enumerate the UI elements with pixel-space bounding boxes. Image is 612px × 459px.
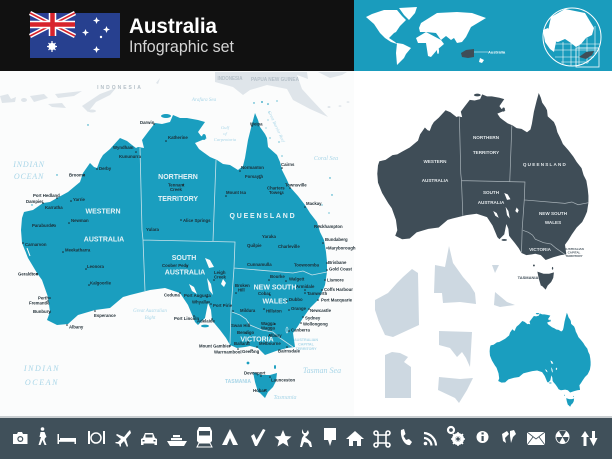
city labels: Hobart (253, 388, 267, 393)
blue small map (490, 313, 591, 407)
city labels: Bourke (270, 274, 285, 279)
city labels: Mount Gambier (199, 344, 231, 348)
icon: walker (38, 427, 46, 445)
dark map state labels: NORTHERN (473, 135, 500, 140)
city labels: Wagga (261, 326, 276, 330)
city labels: Cobar (258, 291, 271, 296)
icon: info (476, 431, 488, 443)
state borders (140, 148, 327, 347)
dark map state labels: NEW SOUTH (539, 211, 568, 216)
lakes (189, 258, 226, 295)
icon: speech marker (324, 428, 336, 446)
sea and ocean labels: Coral Sea (314, 156, 338, 162)
city labels: Normanton (241, 165, 264, 170)
city labels: Newcastle (310, 308, 332, 313)
city labels: Leigh (214, 270, 226, 275)
state labels: NORTHERN (158, 174, 198, 181)
icon: australian flag (30, 13, 120, 58)
icon: car (141, 433, 157, 445)
city labels: Bairnsdale (278, 348, 301, 354)
dark map state labels: AUSTRALIAN (564, 247, 584, 251)
silhouette: new south wales (438, 377, 473, 403)
icon: camera (13, 432, 28, 444)
city labels: Swan Hill (231, 323, 250, 328)
silhouette: victoria (494, 292, 515, 307)
panel: map background (0, 71, 354, 416)
locator: australia marker and label (461, 49, 506, 58)
city labels: Brisbane (328, 260, 347, 265)
icon: gears (448, 427, 465, 446)
city labels: Maryborough (328, 246, 356, 250)
icon: radiation (556, 430, 570, 444)
city labels: Dampier (26, 199, 44, 204)
city labels: Launceston (271, 378, 295, 382)
city labels: Cunnamulla (247, 262, 272, 267)
icon: fork and plate (88, 431, 105, 444)
state labels: AUSTRALIA (165, 270, 205, 276)
city labels: Ceduna (164, 292, 180, 298)
city labels: Sydney (305, 316, 321, 320)
state labels (84, 174, 297, 344)
city labels: Newman (71, 218, 89, 223)
sea and ocean labels: OCEAN (25, 378, 59, 387)
city labels: Port Lincoln (174, 316, 199, 321)
city labels: Hill (238, 288, 245, 292)
city labels: Yaraka (262, 234, 276, 239)
city labels: Charters (267, 186, 285, 190)
state labels: WALES (263, 298, 288, 306)
state labels: TERRITORY (158, 196, 198, 203)
dark map state labels: TERRITORY (565, 254, 583, 258)
sea and ocean labels: Bight (145, 316, 156, 321)
world locator map (366, 7, 486, 65)
silhouette: northern territory (385, 352, 411, 398)
city labels: Devonport (244, 370, 266, 376)
dark map state labels: AUSTRALIA (478, 200, 505, 205)
city labels: Toowoomba (294, 262, 320, 268)
state labels: SOUTH (172, 255, 196, 262)
city labels: Towers (269, 190, 284, 195)
country labels: north of map (218, 76, 299, 83)
city labels: Hillston (266, 308, 282, 314)
act (286, 327, 288, 333)
state labels: NEW SOUTH (254, 284, 296, 292)
city labels: Coffs Harbour (324, 287, 353, 292)
city labels: Dubbo (289, 297, 303, 302)
city labels: Perth (38, 296, 49, 300)
globe locator (543, 8, 601, 67)
city labels: Albany (69, 324, 84, 330)
icon: globe (502, 430, 516, 443)
city labels: Quilpie (247, 243, 262, 248)
city labels: Mackay (306, 201, 322, 206)
dark map state labels: TERRITORY (473, 150, 499, 155)
sea and ocean labels: Tasman Sea (303, 366, 341, 375)
city labels: Port Macquarie (321, 298, 353, 302)
icon: bed (58, 434, 76, 444)
icon: command key (374, 431, 390, 447)
icon row (13, 427, 598, 447)
city labels: Bendigo (237, 330, 255, 335)
dark map state labels: VICTORIA (529, 247, 552, 252)
icon: up and down arrows (581, 431, 598, 446)
city labels: Creek (214, 274, 227, 280)
state labels: WESTERN (86, 208, 120, 216)
city labels: Broken (235, 283, 250, 288)
city labels: Gold Coast (329, 266, 352, 272)
city labels: Bunbury (33, 309, 51, 314)
subtitle: Infographic set (129, 37, 234, 56)
city labels: Fremantle (29, 300, 50, 306)
city labels: Port Hedland (33, 193, 60, 198)
city labels: Ballarat (234, 341, 250, 346)
city labels: Darwin (140, 120, 155, 125)
sea and ocean labels: AUSTRALIAN (294, 338, 318, 342)
city labels: Coober Pedy (162, 263, 189, 268)
city labels: Walgett (289, 276, 305, 282)
main map of australia (21, 100, 333, 398)
city labels: Armidale (296, 284, 315, 289)
city labels: Whyalla (192, 300, 209, 304)
city labels: Paraburdoo (32, 223, 56, 228)
city labels: Weipa (250, 122, 263, 126)
city labels: Lismore (327, 278, 344, 282)
reef islets (31, 100, 333, 214)
sea and ocean labels: TASMANIA (225, 379, 251, 385)
sea and ocean labels: CAPITAL (298, 342, 315, 346)
icon: plane (115, 430, 131, 447)
dark map state labels (422, 135, 584, 280)
city labels: Charleville (278, 244, 300, 249)
icon: rss (424, 433, 436, 446)
country labels: north of map: INDONESIA (218, 76, 243, 82)
city labels: Wyndham (113, 145, 134, 150)
icon: check (251, 429, 266, 446)
dark map state labels: TASMANIA (518, 275, 539, 280)
icon: phone (401, 429, 412, 445)
city labels: Wollongong (303, 322, 328, 326)
city labels: Townsville (285, 182, 307, 188)
icon: train (197, 427, 212, 447)
country labels: north of map: PAPUA NEW GUINEA (251, 77, 299, 83)
city labels: Wagga (261, 321, 276, 326)
city labels: Alice Springs (183, 218, 211, 223)
city labels: Warrnambool (214, 350, 242, 354)
header band (0, 0, 612, 71)
city labels: Geelong (242, 349, 260, 354)
dark map state labels: AUSTRALIA (422, 178, 449, 183)
city labels: Kalgoorlie (90, 280, 112, 286)
silhouette: queensland (434, 246, 476, 304)
city labels: Meekatharra (65, 248, 91, 252)
icon: tent (222, 429, 238, 445)
city dots (22, 123, 328, 391)
landmass (21, 113, 327, 398)
dark map state labels: QUEENSLAND (523, 162, 567, 167)
city labels (18, 120, 356, 393)
city labels: Kununurra (119, 154, 142, 159)
city labels: Port Augusta (184, 293, 211, 298)
sea and ocean labels: INDIAN (23, 364, 60, 373)
icon: star (274, 430, 292, 446)
city labels: Albury (268, 333, 282, 338)
sea and ocean labels: TERRITORY (295, 347, 317, 351)
city labels: Orange (291, 306, 307, 311)
sea and ocean labels: OCEAN (14, 172, 44, 181)
city labels: Forsayth (245, 174, 264, 179)
silhouette: tasmania (492, 265, 499, 273)
sea and ocean labels: Gulf (221, 125, 230, 130)
city labels: Yulara (146, 227, 160, 232)
city labels: Mildura (240, 308, 256, 313)
city labels: Katherine (168, 135, 188, 140)
city labels: Port Pirie (213, 303, 233, 308)
sea and ocean labels: Great Barrier Reef (267, 110, 286, 144)
dark map state labels: WESTERN (424, 159, 447, 164)
neighbouring land: papua new guinea (215, 72, 350, 117)
city labels: Cairns (281, 162, 295, 167)
sea and ocean labels: Arafura Sea (191, 98, 217, 103)
city labels: Derby (99, 166, 112, 171)
country label: indonesia: INDONESIA (97, 85, 143, 91)
icon: deer (300, 429, 312, 447)
icon: mail (527, 432, 545, 445)
city labels: Rockhampton (314, 224, 343, 229)
state labels: QUEENSLAND (229, 213, 297, 220)
dark map of australia (377, 93, 588, 290)
state silhouettes (375, 246, 515, 403)
title: Australia (129, 15, 217, 38)
sea and ocean labels: Great Australian (133, 309, 167, 314)
silhouette: south australia (439, 331, 472, 367)
city labels: Tamworth (307, 291, 328, 296)
icon: house (346, 431, 364, 446)
city labels: Mount Isa (226, 190, 247, 195)
city labels: Yarrie (73, 197, 86, 202)
city labels: Geraldton (18, 272, 39, 276)
state labels: VICTORIA (240, 336, 274, 344)
icon: ship (167, 435, 187, 446)
sea and ocean labels (12, 98, 341, 401)
dark map state labels: CAPITAL (568, 250, 581, 254)
city labels: Tennant (168, 182, 185, 188)
sea and ocean labels: Tasmania (273, 395, 297, 401)
sea and ocean labels: INDIAN (12, 160, 45, 169)
city labels: Esperance (94, 313, 116, 318)
silhouette: western australia (375, 269, 419, 337)
city labels: Creek (170, 187, 183, 192)
city labels: Karratha (45, 205, 63, 210)
dark map state labels: WALES (545, 220, 561, 225)
city labels: Broome (69, 172, 86, 178)
shark bay (21, 245, 30, 258)
neighbouring land: indonesia (0, 78, 160, 112)
city labels: Melbourne (259, 341, 281, 346)
dark map state labels: SOUTH (483, 190, 500, 195)
city labels: Carnarvon (25, 242, 47, 247)
icon bar (0, 416, 612, 459)
city labels: Bundaberg (325, 237, 348, 242)
locator: australia marker and label: Australia (488, 50, 506, 54)
city labels: Leonora (87, 264, 105, 269)
city labels: Adelaide (197, 318, 216, 324)
city labels: Canberra (291, 328, 310, 332)
state labels: AUSTRALIA (84, 236, 124, 244)
sea and ocean labels: Carpentaria (214, 137, 237, 142)
sea and ocean labels: of (223, 131, 227, 136)
